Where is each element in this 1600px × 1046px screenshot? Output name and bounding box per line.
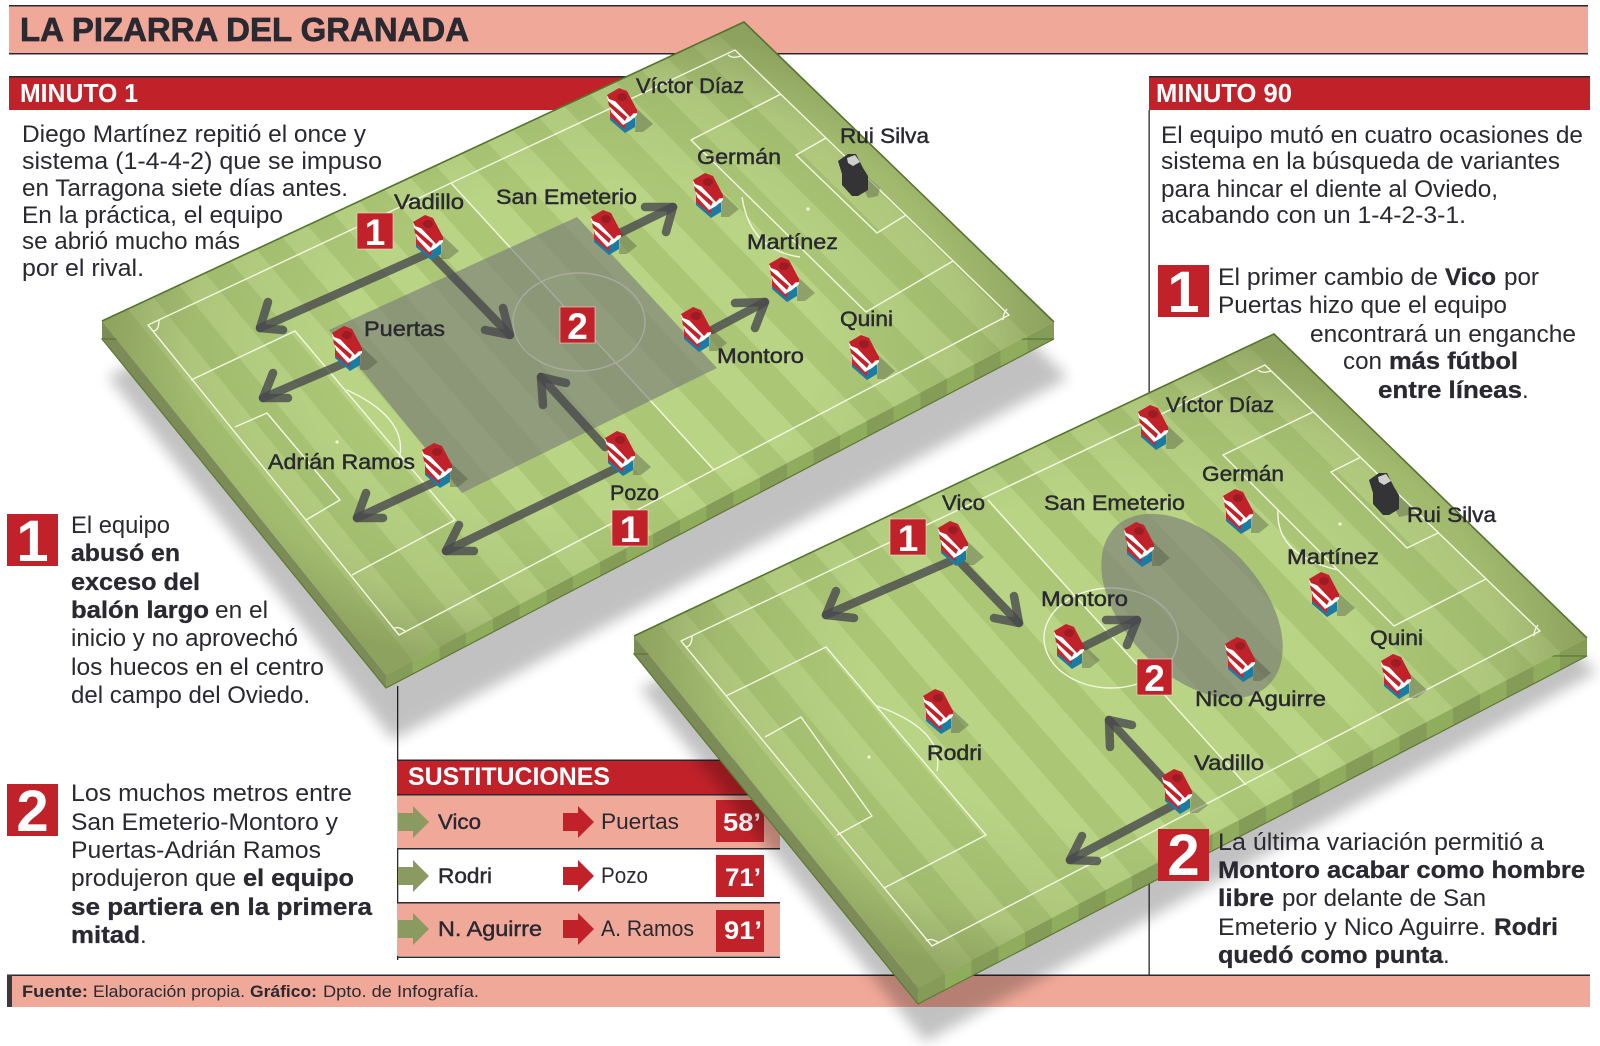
player: Rui Silva: Rui Silva bbox=[840, 125, 929, 148]
header band with title bbox=[9, 5, 1588, 54]
pitch: minuto 90 bbox=[634, 334, 1587, 1004]
note text: Los muchos metros entre bbox=[71, 780, 352, 807]
badge 1 lower: 1 bbox=[620, 509, 640, 550]
arrow: San Emeterio bbox=[620, 207, 673, 233]
player: San Emeterio: San Emeterio bbox=[1044, 492, 1185, 515]
pitch: minuto 1 bbox=[102, 22, 1054, 688]
note text: con bbox=[1343, 348, 1382, 375]
player: Víctor Díaz: Víctor Díaz bbox=[1166, 394, 1274, 417]
note text: en el bbox=[215, 597, 268, 624]
arrow: Montoro bbox=[712, 302, 765, 330]
note 2 left bbox=[7, 779, 373, 949]
arrows: Pozo bbox=[446, 377, 617, 551]
text block: intro Minuto 90 bbox=[1161, 122, 1583, 229]
text block: intro Minuto 1 bbox=[22, 121, 382, 282]
badge 2 bbox=[560, 306, 595, 347]
row: Vico for Puertas: 58’ bbox=[723, 809, 761, 837]
note text: Puertas-Adrián Ramos bbox=[71, 837, 321, 864]
text block: intro Minuto 1: Diego Martínez repitió el once y bbox=[22, 121, 366, 148]
text block: intro Minuto 90: El equipo mutó en cuatro ocasiones de bbox=[1161, 122, 1583, 149]
player: Pozo bbox=[605, 431, 659, 505]
footer band bbox=[7, 974, 1590, 1007]
row: Rodri for Pozo: Rodri bbox=[438, 865, 492, 888]
note text: Puertas hizo que el equipo bbox=[1218, 292, 1507, 319]
source text: Dpto. de Infografía. bbox=[323, 982, 479, 1001]
note text: . bbox=[140, 922, 147, 949]
note text: mitad bbox=[71, 922, 140, 949]
text block: intro Minuto 1: por el rival. bbox=[22, 255, 144, 282]
player: Adrián Ramos: Adrián Ramos bbox=[268, 451, 415, 474]
note text: inicio y no aprovechó bbox=[71, 625, 298, 652]
note text: por bbox=[1504, 264, 1539, 291]
note text: quedó como punta bbox=[1218, 942, 1444, 969]
note text: el equipo bbox=[243, 865, 354, 892]
panel heading: Minuto 1 bbox=[9, 76, 649, 110]
player: Vadillo bbox=[394, 191, 464, 260]
note text: . bbox=[1443, 942, 1450, 969]
note text: entre líneas bbox=[1378, 377, 1522, 404]
number badge 2: 2 bbox=[1167, 823, 1200, 888]
player: Montoro: Montoro bbox=[1041, 588, 1128, 611]
player: Germán bbox=[693, 146, 781, 218]
field 2 drop shadow bbox=[640, 395, 1597, 1042]
player: Víctor Díaz bbox=[607, 75, 744, 133]
row: Rodri for Pozo: Pozo bbox=[601, 863, 648, 888]
player: Montoro bbox=[1041, 588, 1128, 669]
column rule right bbox=[1148, 110, 1150, 976]
note text: encontrará un enganche bbox=[1310, 321, 1576, 348]
heading: sustituciones: SUSTITUCIONES bbox=[408, 763, 610, 791]
badge 1 bbox=[357, 212, 393, 253]
badge 2: 2 bbox=[1144, 658, 1165, 699]
row: Vico for Puertas: Vico bbox=[438, 811, 481, 834]
player: Víctor Díaz: Víctor Díaz bbox=[636, 75, 744, 98]
player: Vico bbox=[938, 492, 985, 566]
note text: libre bbox=[1218, 885, 1274, 912]
badge 2 bbox=[1137, 658, 1172, 699]
row: Vico for Puertas: Puertas bbox=[601, 809, 679, 834]
player: Montoro bbox=[681, 307, 804, 368]
player: Vadillo: Vadillo bbox=[394, 191, 464, 214]
note text bbox=[1218, 829, 1585, 969]
note text: del campo del Oviedo. bbox=[71, 682, 310, 709]
arrow: Puertas bbox=[263, 362, 347, 398]
row: N. Aguirre for A. Ramos: A. Ramos bbox=[601, 916, 694, 941]
player: Vadillo: Vadillo bbox=[1194, 752, 1264, 775]
arrow: Adrián Ramos bbox=[357, 480, 439, 518]
highlighted zone: centre gap bbox=[329, 217, 717, 493]
panel heading: Minuto 1: MINUTO 1 bbox=[20, 78, 138, 108]
panel: sustituciones table bbox=[397, 686, 780, 960]
note text bbox=[1218, 264, 1576, 404]
note 2 right bbox=[1158, 823, 1585, 969]
text block: intro Minuto 1: En la práctica, el equipo bbox=[22, 202, 283, 229]
arrows: Vadillo bbox=[260, 253, 510, 335]
row: Vico for Puertas bbox=[398, 800, 764, 842]
note text: El primer cambio de bbox=[1218, 264, 1438, 291]
note text: más fútbol bbox=[1389, 348, 1518, 375]
badge 1 bbox=[890, 518, 926, 559]
note text bbox=[71, 512, 324, 709]
player: Quini: Quini bbox=[1370, 627, 1423, 650]
player: Puertas: Puertas bbox=[364, 318, 445, 341]
note text: Emeterio y Nico Aguirre. bbox=[1218, 914, 1486, 941]
note 1 left bbox=[7, 509, 324, 709]
number badge 1 bbox=[1158, 260, 1209, 325]
number badge 2 bbox=[7, 779, 58, 844]
number badge 2: 2 bbox=[16, 779, 49, 844]
player: Nico Aguirre bbox=[1195, 637, 1326, 711]
player: Martínez bbox=[1287, 546, 1379, 617]
note text: San Emeterio-Montoro y bbox=[71, 809, 338, 836]
player: Martínez bbox=[747, 231, 838, 302]
text block: intro Minuto 90: sistema en la búsqueda de variantes bbox=[1161, 148, 1560, 175]
player: Germán: Germán bbox=[1202, 463, 1284, 486]
player: Montoro: Montoro bbox=[717, 345, 804, 368]
note text: los huecos en el centro bbox=[71, 654, 324, 681]
text block: intro Minuto 1: sistema (1-4-4-2) que se impuso bbox=[22, 148, 382, 175]
player: Nico Aguirre: Nico Aguirre bbox=[1195, 688, 1326, 711]
text block: intro Minuto 90: acabando con un 1-4-2-3-1. bbox=[1161, 202, 1466, 229]
player: Germán bbox=[1202, 463, 1284, 534]
note text: El equipo bbox=[71, 512, 170, 539]
note text bbox=[71, 780, 373, 949]
text block: intro Minuto 1: se abrió mucho más bbox=[22, 228, 240, 255]
note text: produjeron que bbox=[71, 865, 236, 892]
badge 1 lower bbox=[612, 509, 648, 550]
source text: Elaboración propia. bbox=[93, 982, 245, 1001]
player: Germán: Germán bbox=[697, 146, 781, 169]
title: LA PIZARRA DEL GRANADA bbox=[20, 11, 469, 48]
row: N. Aguirre for A. Ramos: 91’ bbox=[724, 917, 762, 945]
player: San Emeterio bbox=[496, 186, 637, 255]
row: Rodri for Pozo: 71’ bbox=[725, 864, 761, 892]
player: Adrián Ramos bbox=[268, 443, 468, 488]
note text: se partiera en la primera bbox=[71, 894, 373, 921]
panel heading: Minuto 90: MINUTO 90 bbox=[1156, 78, 1292, 108]
arrow: Montoro bbox=[1085, 620, 1137, 646]
player: Quini bbox=[840, 308, 895, 380]
source text: Gráfico: bbox=[250, 982, 317, 1001]
arrows: Vico bbox=[826, 560, 1019, 623]
note 1 right bbox=[1158, 260, 1576, 404]
note text: Rodri bbox=[1494, 914, 1558, 941]
player: Rui Silva: Rui Silva bbox=[1407, 504, 1496, 527]
number badge 1: 1 bbox=[1167, 260, 1200, 325]
note text: . bbox=[1522, 377, 1529, 404]
note text: Vico bbox=[1445, 264, 1496, 291]
player: Pozo: Pozo bbox=[610, 482, 659, 505]
note text: La última variación permitió a bbox=[1218, 829, 1545, 856]
player: Quini: Quini bbox=[840, 308, 893, 331]
text block: intro Minuto 90: para hincar el diente al Oviedo, bbox=[1161, 176, 1498, 203]
field 1 drop shadow bbox=[108, 70, 1068, 740]
player: Rodri: Rodri bbox=[927, 742, 982, 765]
badge 1: 1 bbox=[365, 212, 385, 253]
row: Rodri for Pozo bbox=[398, 855, 764, 897]
player: San Emeterio bbox=[1044, 492, 1185, 567]
number badge 1: 1 bbox=[16, 509, 49, 574]
panel heading: Minuto 90 bbox=[1149, 76, 1590, 110]
highlighted zone: midfield ellipse bbox=[1067, 480, 1317, 732]
row: N. Aguirre for A. Ramos bbox=[398, 910, 764, 952]
player: Vadillo bbox=[1162, 752, 1264, 814]
note text: abusó en bbox=[71, 540, 180, 567]
source text: Fuente: bbox=[22, 982, 88, 1001]
player: Martínez: Martínez bbox=[1287, 546, 1379, 569]
number badge 2 bbox=[1158, 823, 1209, 888]
player: Martínez: Martínez bbox=[747, 231, 838, 254]
note text: exceso del bbox=[71, 569, 200, 596]
player: Rui Silva bbox=[838, 125, 929, 198]
player: Rui Silva bbox=[1369, 473, 1496, 527]
player: Puertas bbox=[332, 318, 445, 371]
player: Quini bbox=[1370, 627, 1427, 699]
player: San Emeterio: San Emeterio bbox=[496, 186, 637, 209]
source text bbox=[22, 982, 479, 1001]
note text: por delante de San bbox=[1282, 885, 1486, 912]
text block: intro Minuto 1: en Tarragona siete días antes. bbox=[22, 175, 348, 202]
number badge 1 bbox=[7, 509, 58, 574]
arrows: Vadillo bbox=[1070, 720, 1172, 861]
player: Víctor Díaz bbox=[1138, 394, 1274, 450]
note text: balón largo bbox=[71, 597, 209, 624]
row: N. Aguirre for A. Ramos: N. Aguirre bbox=[438, 918, 542, 941]
note text: Montoro acabar como hombre bbox=[1218, 857, 1585, 884]
player: Vico: Vico bbox=[942, 492, 985, 515]
badge 1: 1 bbox=[898, 518, 918, 559]
badge 2: 2 bbox=[567, 306, 588, 347]
player: Rodri bbox=[923, 689, 982, 765]
